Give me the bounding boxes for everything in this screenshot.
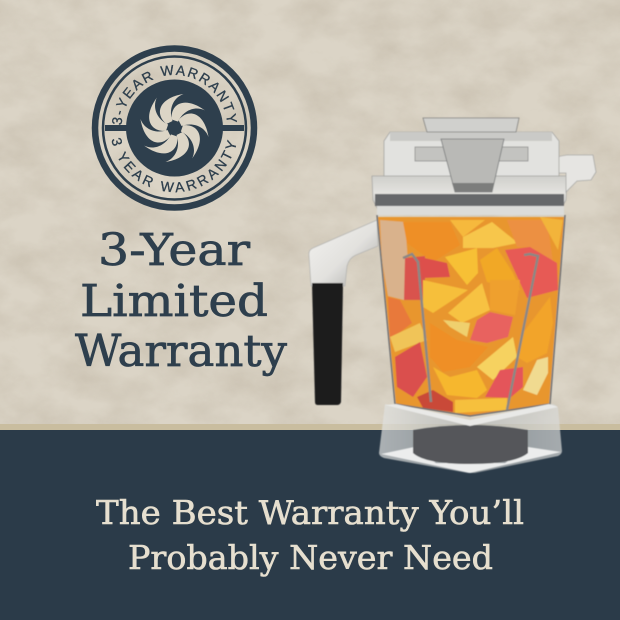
heading: 3-Year Limited Warranty: Warranty bbox=[75, 326, 287, 377]
lid centre plug bbox=[441, 139, 504, 192]
pour spout bbox=[523, 155, 596, 192]
blender handle bbox=[309, 220, 378, 286]
plug dark tip bbox=[452, 183, 494, 192]
textured parchment background bbox=[0, 0, 620, 430]
blender illustration bbox=[309, 118, 596, 473]
badge outer ring bbox=[95, 48, 254, 208]
footer tagline: Probably Never Need bbox=[128, 538, 493, 577]
jar walls and inner metal rods bbox=[377, 215, 565, 416]
heading: 3-Year Limited Warranty bbox=[75, 225, 287, 377]
lid top plate bbox=[390, 132, 552, 141]
blender base bbox=[379, 404, 562, 473]
navy footer panel bbox=[0, 430, 620, 620]
badge upper arc text: 3-YEAR WARRANTY bbox=[112, 64, 237, 125]
tan divider band bbox=[0, 424, 620, 431]
badge divider bar bbox=[105, 125, 244, 131]
lid top cap bbox=[423, 118, 519, 132]
badge centre disc bbox=[126, 80, 223, 176]
base bottom highlight bbox=[381, 447, 561, 473]
footer tagline: The Best Warranty You’ll bbox=[96, 493, 524, 532]
base dark drive socket bbox=[413, 425, 528, 464]
base top rim bbox=[385, 404, 558, 426]
swirl blades icon bbox=[140, 94, 209, 162]
black handle grip bbox=[312, 283, 343, 405]
lid middle section bbox=[384, 132, 559, 176]
collar dark gasket bbox=[375, 194, 564, 206]
jar collar bbox=[372, 176, 567, 214]
badge lower arc text: 3 YEAR WARRANTY bbox=[112, 138, 236, 192]
collar lower rim bbox=[377, 206, 564, 215]
heading: 3-Year Limited Warranty: Limited bbox=[80, 276, 268, 327]
warranty badge bbox=[92, 45, 258, 211]
jar body with fruit bbox=[376, 215, 566, 420]
badge inner ring bbox=[103, 56, 246, 200]
heading: 3-Year Limited Warranty: 3-Year bbox=[98, 225, 251, 276]
lid side windows bbox=[415, 147, 528, 161]
footer tagline bbox=[96, 493, 524, 577]
